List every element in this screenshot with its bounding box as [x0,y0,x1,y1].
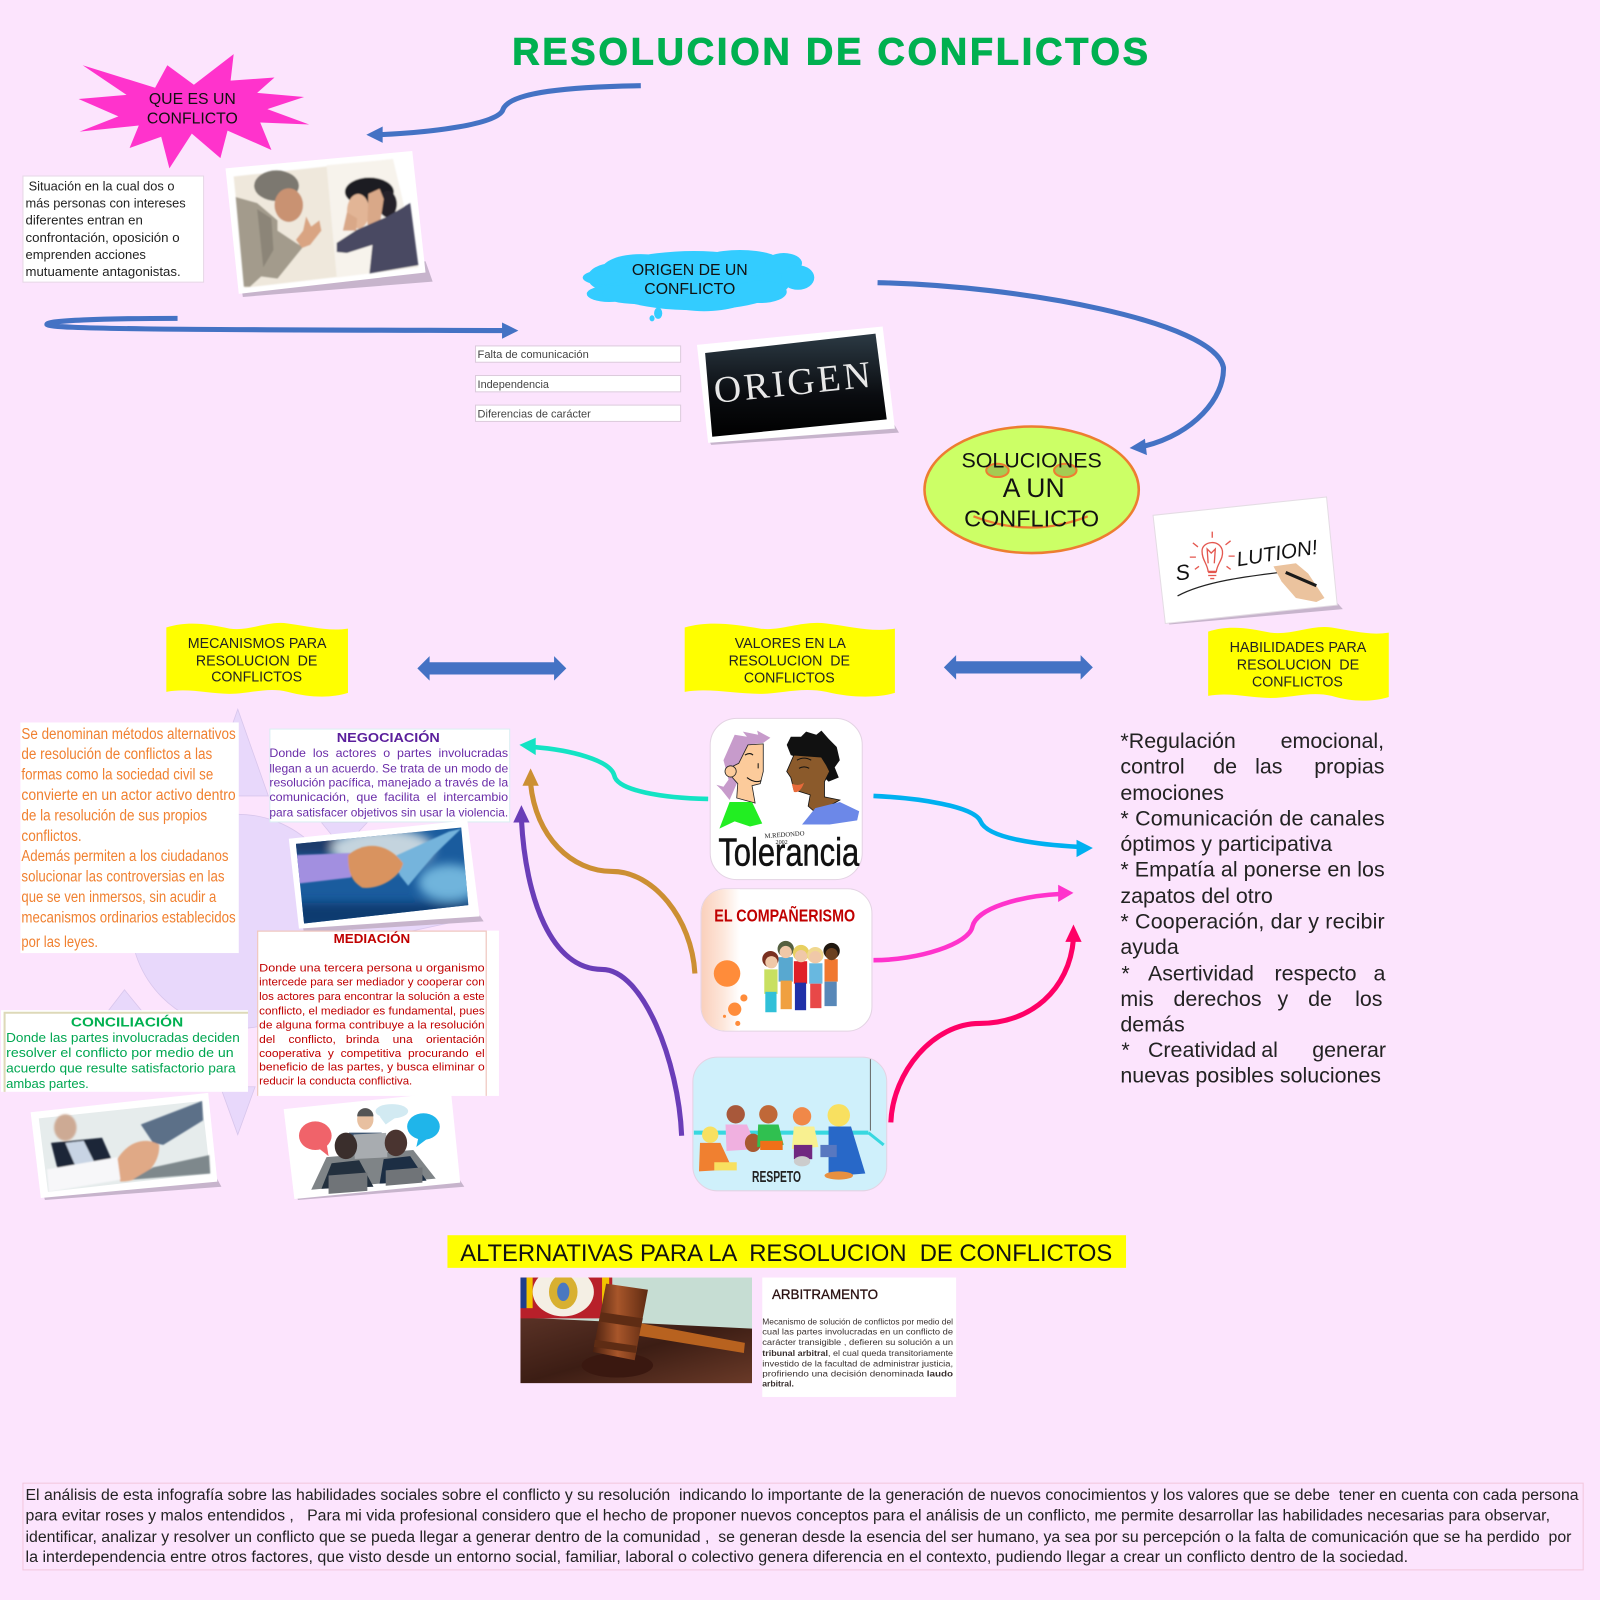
list item [476,346,681,362]
text box: definition of conflict: diferentes entran en [26,212,143,227]
text block: habilidades list: de [1308,987,1332,1011]
cloud: origen de un conflicto [583,250,814,321]
body text: ambas partes. [6,1076,89,1091]
banner: alternativas: ALTERNATIVAS PARA LA RESOLUCION DE CONFLICTOS [460,1240,1112,1267]
body text: Donde los actores o partes involucradas [269,747,508,760]
text block: habilidades list: al [1261,1038,1278,1062]
body text: llegan a un acuerdo. Se trata de un modo de [269,762,508,775]
text block: habilidades list: emocional, [1281,729,1384,753]
text block: habilidades list: * Cooperación, dar y recibir [1120,910,1385,934]
body text: Donde las partes involucradas deciden [6,1030,240,1045]
photo: solution [1153,497,1343,624]
body text: del conflicto, brinda una orientación [259,1034,485,1046]
heading: ARBITRAMENTO [772,1287,878,1303]
heading: MEDIACIÓN [334,931,410,946]
banner: mecanismos: MECANISMOS PARA [188,636,327,652]
starburst: que es un conflicto: QUE ES UN [149,91,236,108]
heading: CONCILIACIÓN [71,1015,183,1030]
banner: habilidades: HABILIDADES PARA [1230,640,1366,656]
text block: habilidades list: de [1213,754,1237,778]
banner: valores: CONFLICTOS [744,671,835,687]
smiley: soluciones a un conflicto [924,427,1139,553]
title: RESOLUCION DE CONFLICTOS [512,30,1148,72]
panel: negociacion [269,729,510,822]
body text: Mecanismo de solución de conflictos por medio del [762,1316,953,1326]
text block: habilidades list: zapatos del otro [1120,884,1273,908]
text block: analysis [23,1483,1583,1570]
card: respeto: RESPETO [752,1169,801,1186]
body text [269,747,509,819]
list item: Diferencias de carácter [478,408,591,420]
text block: habilidades list: * [1121,962,1130,986]
smiley: soluciones a un conflicto: SOLUCIONES [961,448,1102,472]
text block: analysis: la interdependencia entre otros factores, que visto desde un entorno social, familiar, laboral o colectivo genera diferencia en el contexto, pudiendo llegar a crear un conflicto dentro de la sociedad. [26,1549,1408,1566]
photo: handshake [289,820,484,933]
text block: habilidades list: y [1278,987,1289,1011]
body text: los actores para encontrar la solución a este [259,991,485,1003]
arrow: respeto to mecanismos [513,805,682,1136]
text box: definition of conflict: Situación en la cual dos o [29,178,174,193]
text block: habilidades list: emociones [1120,781,1224,805]
arrow: title to que es un conflicto [366,86,641,143]
card: companerismo: EL COMPAÑERISMO [714,904,855,925]
body text: intercede para ser mediador y cooperar con [259,977,485,989]
heading: NEGOCIACIÓN [337,730,440,745]
body text: carácter transigible , defieren su solución a un [762,1337,953,1347]
photo: origen: ORIGEN [712,354,873,412]
banner: valores: VALORES EN LA [735,636,846,652]
text block: habilidades list: óptimos y participativa [1120,832,1332,856]
text block: habilidades list: *Regulación [1120,729,1236,753]
arrow: to soluciones [878,283,1223,455]
smiley: soluciones a un conflicto: CONFLICTO [964,506,1099,532]
card: respeto [693,1057,887,1191]
text box: definition of conflict: confrontación, oposición o [26,230,180,245]
text box: metodos alternativos: convierte en un actor activo dentro [21,787,236,804]
photo: two people arguing [226,151,433,297]
double arrow: left [417,656,566,681]
banner: habilidades: RESOLUCION DE [1237,657,1359,673]
list item: Independencia [478,379,549,391]
text box: definition of conflict [23,176,204,282]
radial diagram background [107,709,456,1135]
text block: habilidades list: nuevas posibles soluciones [1120,1064,1381,1088]
list: causes of conflict [476,346,681,421]
text block: habilidades list: * Comunicación de canales [1120,807,1385,831]
text block: habilidades list: Creatividad [1148,1038,1256,1062]
list item [476,405,681,421]
card: tolerancia [710,718,862,880]
text box: metodos alternativos: de resolución de conflictos a las [21,746,213,763]
text box: definition of conflict: más personas con intereses [26,196,186,211]
body text [259,962,485,1088]
tolerancia handwritten label: Tolerancia [718,831,860,874]
text block: habilidades list: Asertividad [1148,962,1254,986]
text block: habilidades list: respecto [1274,962,1357,986]
text block: habilidades list [1120,729,1386,1088]
text box: definition of conflict: mutuamente antagonistas. [26,264,181,279]
cloud: origen de un conflicto: ORIGEN DE UN [632,262,748,279]
photo: solution: LUTION! [1235,537,1320,571]
body text: beneficio de las partes, y busca eliminar o [259,1061,485,1073]
text block: habilidades list: las [1255,754,1282,778]
banner: mecanismos [166,623,348,697]
card: tolerancia: 2002 [776,840,788,846]
text block: habilidades list: demás [1120,1013,1185,1037]
right face [787,731,859,824]
body text [6,1030,240,1091]
banner: habilidades: CONFLICTOS [1252,675,1343,691]
banner: mecanismos: RESOLUCION DE [196,653,317,669]
list item [476,376,681,392]
text box: metodos alternativos: conflictos. [21,828,82,845]
card: tolerancia: M.REDONDO [764,830,805,840]
text block: habilidades list: los [1355,987,1382,1011]
body text: arbitral. [762,1379,794,1389]
panel: arbitramento [762,1278,956,1397]
arrow: tolerancia to habilidades [873,796,1093,857]
body text: Donde una tercera persona u organismo [259,962,485,974]
text block: analysis: identificar, analizar y resolver un conflicto que se pueda llegar a generar dentro de la comunidad , se generan desde la esencia del ser humano, ya sea por su percepción o la falta de comunicación que se ha perdido por [26,1529,1571,1546]
photo: solution: S [1174,560,1192,586]
text block: habilidades list: * Empatía al ponerse en los [1120,858,1385,882]
photo: origen [697,327,899,445]
children group [762,941,840,1012]
card: companerismo [701,889,872,1031]
photo: gavel [520,1267,752,1384]
text block: habilidades list: * [1121,1038,1130,1062]
body text: tribunal arbitral , el cual queda transitoriamente [762,1348,953,1358]
text block: habilidades list: mis [1120,987,1154,1011]
text block: habilidades list: propias [1314,754,1385,778]
text block: habilidades list: generar [1312,1038,1386,1062]
body text: reducir la conducta conflictiva. [259,1076,412,1088]
text block: habilidades list: ayuda [1120,935,1179,959]
banner: valores: RESOLUCION DE [729,653,850,669]
body text [762,1316,953,1389]
body text: comunicación, que facilita el intercambio [269,791,509,804]
arrow: tolerancia to mecanismos [519,738,708,799]
banner: valores [685,623,895,697]
list item: Falta de comunicación [478,349,589,361]
banner: habilidades [1208,627,1389,701]
text box: metodos alternativos: solucionar las controversias en las [21,869,225,886]
body text: resolución pacífica, manejado a través de la [269,777,509,790]
body text: conflicto, el mediador es fundamental, pues [259,1005,485,1017]
text block: habilidades list: control [1120,754,1185,778]
photo: meeting illustration [284,1092,464,1200]
text block: analysis: El análisis de esta infografía sobre las habilidades sociales sobre el conflicto y su resolución indicando lo importante de la generación de nuevos conocimientos y los valores que se debe tener en cuenta con cada persona [26,1487,1579,1504]
photo: conciliacion handshake [31,1093,221,1200]
text box: metodos alternativos [20,722,239,953]
smiley: soluciones a un conflicto: A UN [1003,473,1065,503]
text box: metodos alternativos: Además permiten a los ciudadanos [21,848,229,865]
arrow: to origen [47,318,518,339]
body text: para satisfacer objetivos sin usar la violencia. [269,806,508,819]
body text: profiriendo una decisión denominada laudo [762,1369,953,1379]
panel: conciliacion [1,1010,248,1092]
text box: metodos alternativos: mecanismos ordinarios establecidos [21,909,236,926]
text box: metodos alternativos: de la resolución de sus propios [21,807,207,824]
text box: definition of conflict: emprenden acciones [26,247,146,262]
text box: metodos alternativos: que se ven inmersos, sin acudir a [21,889,217,906]
seated children [699,1104,865,1180]
panel: mediacion [257,931,499,1096]
arrow: companerismo to habilidades [873,885,1073,960]
text box: metodos alternativos: por las leyes. [21,934,98,951]
body text: investido de la facultad de administrar justicia, [762,1358,953,1368]
body text: acuerdo que resulte satisfactorio para [6,1060,237,1075]
text block: habilidades list: derechos [1173,987,1262,1011]
cloud: origen de un conflicto: CONFLICTO [644,281,735,298]
body text: cual las partes involucradas en un conflicto de [762,1327,953,1337]
body text: resolver el conflicto por medio de un [6,1045,234,1060]
starburst: que es un conflicto: CONFLICTO [147,110,238,127]
double arrow: right [944,655,1093,680]
starburst: que es un conflicto [79,54,309,168]
left face [716,731,770,829]
text block: analysis: para evitar roses y malos entendidos , Para mi vida profesional considero que el hecho de proponer nuevos conceptos para el análisis de un conflicto, me permite desarrollar las habilidades necesarias para observar, [26,1507,1550,1524]
text box: metodos alternativos: Se denominan métodos alternativos [21,726,236,743]
text block: habilidades list: a [1373,962,1385,986]
text box: metodos alternativos: formas como la sociedad civil se [21,767,213,784]
body text: cooperativa y competitiva procurando el [259,1048,485,1060]
banner: mecanismos: CONFLICTOS [211,670,302,686]
arrow: companerismo to mecanismos [522,768,695,973]
body text: de alguna forma contribuye a la resolución [259,1020,485,1032]
arrow: respeto to habilidades [891,924,1082,1122]
